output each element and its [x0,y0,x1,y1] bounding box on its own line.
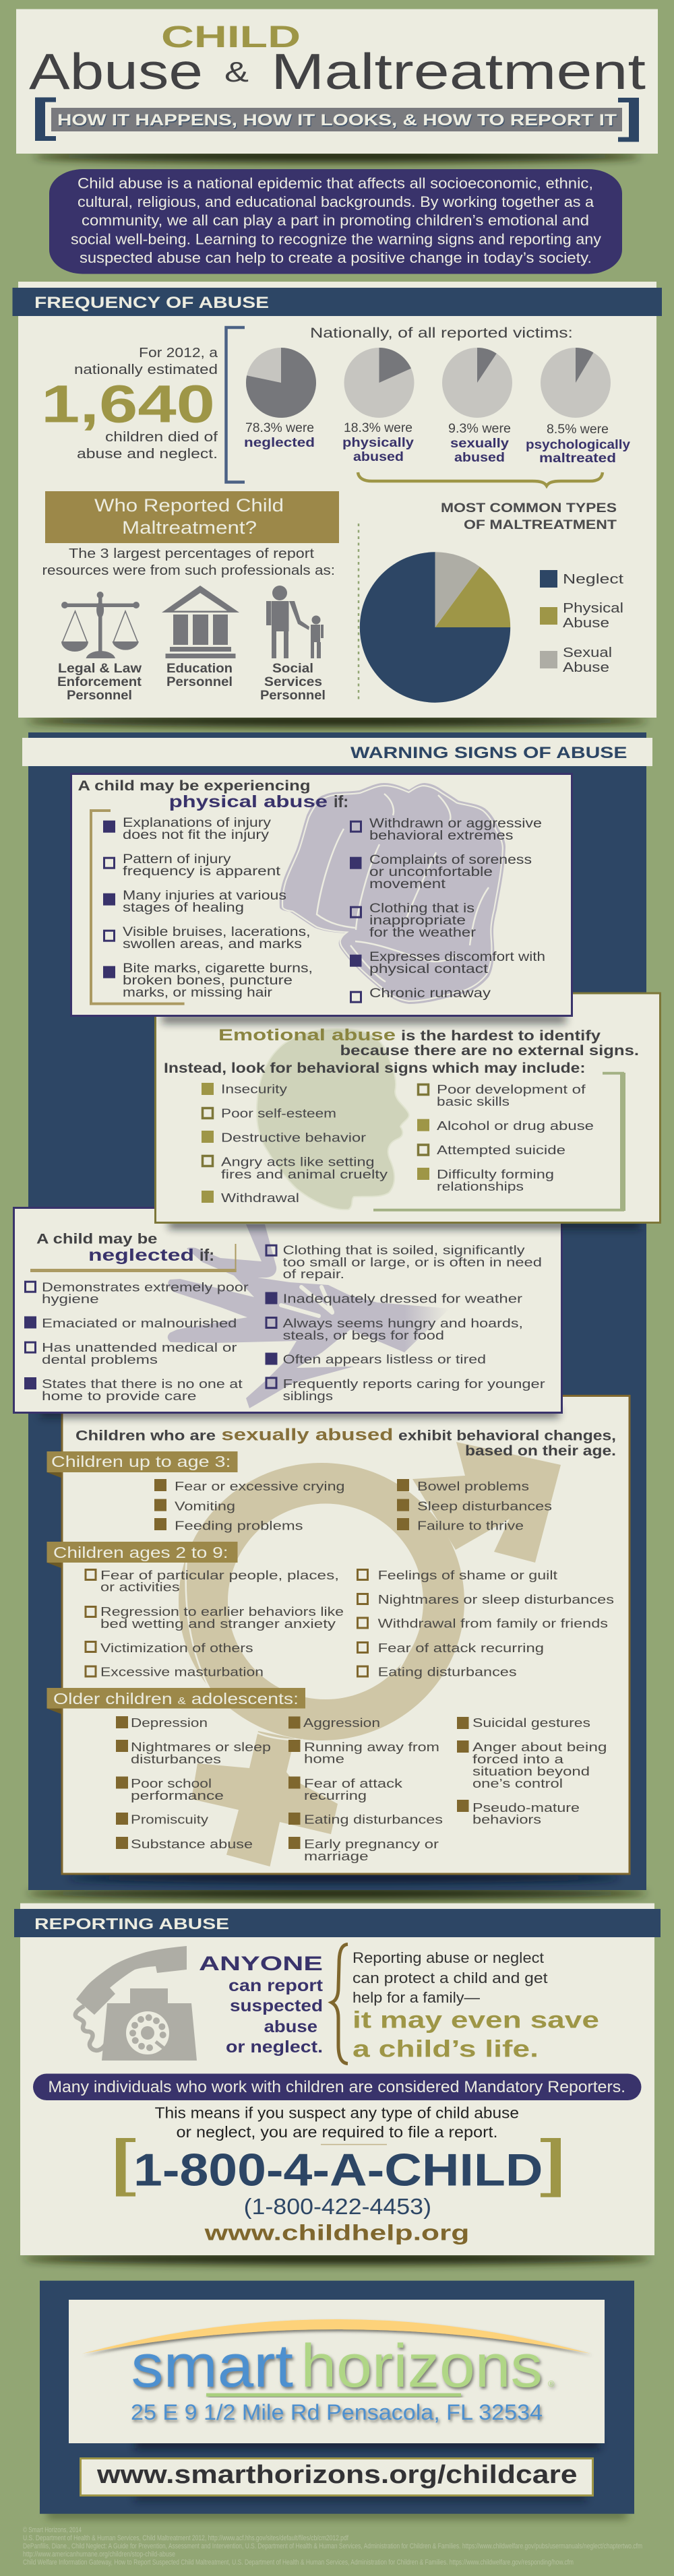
label: legal and law enforcement personnel: Personnel [67,689,132,703]
list: emotional signs left: Withdrawal [221,1191,299,1205]
panel: physical abuse [71,774,572,1024]
list: up to age 3: Feeding problems [175,1519,303,1532]
list: older children: Fear of attack [304,1777,403,1790]
list: older children: Poor school [131,1777,212,1790]
list: physical signs left: stages of healing [123,901,244,915]
title: abuse and maltreatment: Abuse [29,43,203,100]
list: older children [116,1716,607,1863]
list: older children: marriage [304,1850,369,1863]
list: ages 2 to 9: Fear of particular people, places, [100,1569,339,1582]
logo arc [82,2319,591,2354]
list: neglect signs left: home to provide care [42,1389,197,1403]
logo wordmark: smart [131,2333,293,2400]
text: anyone can report: ANYONE [199,1953,323,1975]
list: physical signs right: Chronic runaway [369,986,491,1001]
icon: adult and child [266,586,324,658]
label: education personnel: Personnel [166,675,233,689]
list: neglect signs right: Clothing that is soiled, significantly [283,1244,525,1257]
list: up to age 3: Vomiting [175,1500,235,1513]
heading: physical abuse: if: [334,792,348,811]
list: emotional signs right: Attempted suicide [437,1143,565,1157]
list: ages 2 to 9: Excessive masturbation [100,1666,264,1679]
list: older children: behaviors [472,1813,541,1827]
text: reporting can protect: it may even save [353,2007,599,2034]
heading: physical abuse [78,778,348,811]
list: older children: recurring [304,1789,367,1802]
list: physical signs right: inappropriate [369,914,466,928]
pie chart: maltreatment types [360,552,510,703]
pie: psychologically maltreated 8.5% [526,348,630,466]
heading: most common types [441,501,617,532]
list: neglect signs right: steals, or begs for food [283,1329,444,1342]
text: required to file: This means if you suspect any type of child abuse [155,2104,519,2122]
panel: introduction: suspected abuse can help to create a positive change in today’s society. [80,249,592,266]
address: 25 E 9 1/2 Mile Rd Pensacola, FL 32534 [131,2400,543,2424]
list: emotional signs right: basic skills [437,1095,510,1108]
list: ages 2 to 9: Regression to earlier behaviors like [100,1605,344,1619]
section heading bar [14,1909,661,1937]
pie: psychologically maltreated 8.5%: maltreated [539,451,616,466]
text: report resources: resources were from such professionals as: [42,563,335,578]
statistic: 1,640 children: 1,640 [41,373,215,434]
heading: most common types: MOST COMMON TYPES [441,501,617,515]
list: physical signs right: movement [369,877,446,891]
icon: hands watermark [168,1224,450,1408]
curly brace [358,472,603,486]
list: up to age 3: Sleep disturbances [417,1500,552,1513]
heading bar: warning signs of abuse: WARNING SIGNS OF ABUSE [350,744,627,762]
list: physical signs right: for the weather [369,926,477,940]
subtitle bar with brackets: HOW IT HAPPENS, HOW IT LOOKS, & HOW TO REPORT IT [57,111,617,129]
list: neglect signs left: dental problems [42,1353,158,1366]
section heading bar: REPORTING ABUSE [34,1915,229,1933]
label: education personnel [166,662,233,689]
pie: sexually abused 9.3% [442,348,512,465]
heading: emotional abuse: because there are no external signs. [340,1043,639,1059]
panel: frequency of abuse [12,282,662,727]
legend: Sexual [563,645,612,660]
title: abuse and maltreatment [29,43,646,100]
list: physical signs right [350,817,545,1002]
text: reporting can protect: can protect a child and get [353,1970,548,1986]
list: physical signs left [103,816,313,1000]
list: neglect signs right: Frequently reports caring for younger [283,1377,545,1391]
website box [81,2458,593,2496]
panel: sexual abuse [47,1396,630,1874]
pie: neglected 78.3%: 78.3% were [245,421,314,435]
list: emotional signs left: Destructive behavior [221,1131,366,1144]
statistic: 1,640 children: children died of [105,430,218,445]
list: physical signs left: does not fit the injury [123,828,270,842]
list: neglect signs left: Has unattended medical or [42,1341,237,1354]
ribbon: children ages 2 to 9: Children ages 2 to 9: [53,1544,228,1561]
title: abuse and maltreatment: Maltreatment [271,43,646,100]
heading: sexually abused [75,1425,616,1459]
legend: Abuse [563,615,609,631]
panel: smart horizons footer [40,2281,634,2519]
list: physical signs left: frequency is apparent [123,865,281,879]
ribbon: older children and adolescents [47,1688,305,1714]
legend: Abuse [563,660,609,675]
footnotes: © Smart Horizons, 2014 [23,2526,82,2534]
list: up to age 3 [154,1479,552,1532]
panel: reporting abuse [14,1904,661,2265]
list: older children: Substance abuse [131,1837,253,1851]
text: anyone can report: or neglect. [226,2038,323,2056]
list: older children: Running away from [304,1740,439,1754]
heading: emotional abuse: Emotional abuse [218,1026,396,1044]
list: neglect signs right [266,1244,545,1403]
brace [332,1945,348,2063]
heading box: who reported: Who Reported Child [94,495,284,515]
list: neglect signs right: of repair. [283,1267,344,1281]
list: physical signs left: broken bones, puncture [123,974,293,988]
list: neglect signs left: Demonstrates extremely poor [42,1280,249,1294]
text: required to file [155,2104,519,2141]
label: legal and law enforcement personnel: Legal & Law [58,662,142,676]
pie: physically abused 18.3%: abused [353,450,404,464]
list: physical signs left: Explanations of injury [123,816,272,830]
heading box: who reported: Maltreatment? [122,517,257,538]
footnotes: U.S. Department of Health & Human Services, Child Maltreatment 2012, http://www.acf.hhs.gov/sites/default/files/cb/cm2012.pdf [23,2534,349,2542]
logo wordmark: ® [548,2379,555,2389]
list: physical signs right: behavioral extremes [369,829,514,843]
list: neglect signs right: siblings [283,1389,333,1403]
footnotes: http://www.americanhumane.org/children/stop-child-abuse [23,2550,175,2558]
title: child: CHILD [161,20,301,54]
list: neglect signs left: Emaciated or malnourished [42,1317,237,1330]
list: up to age 3: Fear or excessive crying [175,1480,345,1493]
pie: physically abused 18.3%: physically [342,436,414,450]
list: physical signs left: marks, or missing hair [123,986,273,1000]
heading: physical abuse: physical abuse [169,792,328,811]
panel: emotional abuse [155,993,661,1229]
pill: mandatory reporters: Many individuals who work with children are considered Mandatory Reporters. [48,2078,625,2096]
hotline with brackets: 1-800-4-A-CHILD [133,2145,543,2196]
logo card [69,2300,605,2443]
legend: Neglect [563,571,623,587]
icon: head silhouette watermark [257,1029,409,1210]
heading: emotional abuse: Instead, look for behavioral signs which may include: [164,1061,586,1076]
statistic: 1,640 children: For 2012, a [139,346,218,360]
ribbon: children up to age 3 [47,1451,237,1478]
list: physical signs right: physical contact [369,962,489,976]
text: report resources [42,546,335,578]
pie: sexually abused 9.3%: abused [454,451,505,465]
heading box: who reported [45,491,339,543]
list: older children: Anger about being [472,1740,607,1754]
list: older children: one’s control [472,1777,563,1790]
heading: emotional abuse [164,1026,639,1076]
list: neglect signs right: too small or large, or is often in need [283,1256,542,1269]
heading: sexually abused: based on their age. [465,1443,616,1459]
ribbon: children up to age 3: Children up to age 3: [51,1453,231,1470]
panel: header [16,9,658,162]
heading bar: warning signs of abuse [22,738,652,766]
list: ages 2 to 9: Victimization of others [100,1641,253,1655]
phone number: (1-800-422-4453) [244,2194,431,2219]
list: physical signs right: Complaints of soreness [369,853,532,867]
list: physical signs right: or uncomfortable [369,865,493,879]
list: older children: home [304,1752,344,1765]
list: older children: forced into a [472,1753,564,1766]
pie: psychologically maltreated 8.5%: 8.5% were [547,422,609,437]
label: education personnel: Education [166,662,233,676]
icon: fist watermark [280,783,506,1004]
list: neglect signs right: Always seems hungry and hoards, [283,1317,523,1330]
text: anyone can report: suspected [230,1997,323,2015]
list: emotional signs left [202,1082,388,1205]
list: ages 2 to 9: Withdrawal from family or friends [378,1617,608,1631]
text: anyone can report: can report [228,1976,324,1995]
pie: physically abused 18.3%: 18.3% were [344,421,412,435]
text: anyone can report: abuse [264,2017,317,2036]
label: legal and law enforcement personnel: Enforcement [57,675,142,689]
website box: www.smarthorizons.org/childcare [96,2461,578,2489]
text: required to file: or neglect, you are required to file a report. [177,2123,497,2141]
legend: Physical [563,600,623,616]
list: physical signs left: Many injuries at various [123,889,286,903]
heading: most common types: OF MALTREATMENT [464,518,617,532]
list: emotional signs right: Difficulty forming [437,1168,554,1181]
text: reporting can protect [353,1949,599,2062]
list: neglect signs right: Inadequately dressed for weather [283,1292,522,1306]
heading: sexually abused: exhibit behavioral changes, [398,1428,616,1443]
logo wordmark [131,2333,555,2400]
list: emotional signs left: fires and animal cruelty [221,1168,388,1181]
label: legal and law enforcement personnel [57,662,142,703]
list: physical signs left: Visible bruises, lacerations, [123,925,310,939]
list: older children: Promiscuity [131,1813,208,1827]
pie: physically abused 18.3% [342,348,414,464]
list: ages 2 to 9: bed wetting and stranger anxiety [100,1617,336,1631]
list: older children: Nightmares or sleep [131,1740,271,1754]
section heading bar: FREQUENCY OF ABUSE [34,294,269,312]
statistic: 1,640 children: abuse and neglect. [77,447,218,462]
list: ages 2 to 9: or activities [100,1581,180,1594]
list: older children: situation beyond [472,1765,590,1778]
list: physical signs left: Pattern of injury [123,852,231,867]
list: physical signs left: Bite marks, cigarette burns, [123,962,313,976]
icon: school building [162,586,239,658]
list: older children: Depression [131,1716,208,1730]
list: emotional signs left: Insecurity [221,1082,287,1096]
panel: introduction: social well-being. Learning to recognize the warning signs and reporting any [71,230,602,247]
list: ages 2 to 9: Feelings of shame or guilt [378,1569,557,1582]
statistic: 1,640 children [41,346,218,462]
list: emotional signs left: Angry acts like setting [221,1155,375,1168]
list: ages 2 to 9: Fear of attack recurring [378,1641,544,1655]
footnotes [23,2526,642,2567]
pill: mandatory reporters [33,2074,642,2100]
list: emotional signs left: Poor self-esteem [221,1106,336,1120]
pie: psychologically maltreated 8.5%: psychologically [526,438,630,452]
panel: introduction: Child abuse is a national epidemic that affects all socioeconomic, ethnic, [78,175,593,192]
list: emotional signs right [417,1083,594,1193]
text: report resources: The 3 largest percentages of report [69,546,314,561]
list: older children: Aggression [303,1716,380,1730]
pie: neglected 78.3%: neglected [244,436,315,450]
heading: neglected [36,1232,214,1265]
list: ages 2 to 9: Eating disturbances [378,1666,517,1679]
icon: scales of justice [61,592,140,658]
panel: introduction: cultural, religious, and educational backgrounds. By working together as a [78,193,594,210]
list: physical signs right: Clothing that is [369,902,474,916]
list: emotional signs right: Poor development of [437,1083,586,1096]
panel: introduction: community, we all can play a part in promoting children’s emotional and [82,212,589,229]
legend [540,570,623,675]
heading: neglected: neglected [88,1246,194,1265]
text: anyone can report [199,1953,324,2056]
label: social services personnel [260,662,326,703]
heading: neglected: if: [200,1246,214,1265]
list: ages 2 to 9: Nightmares or sleep disturbances [378,1593,614,1606]
list: neglect signs left [24,1280,249,1403]
text: reporting can protect: help for a family— [353,1989,481,2006]
ribbon: children ages 2 to 9 [47,1542,237,1568]
list: emotional signs right: Alcohol or drug abuse [437,1119,594,1133]
list: emotional signs right: relationships [437,1180,524,1193]
pie: sexually abused 9.3%: sexually [450,437,510,451]
logo wordmark: horizons [301,2333,543,2400]
heading: sexually abused: sexually abused [221,1425,393,1444]
label: social services personnel: Social [272,662,313,676]
icon: rotary telephone [75,1946,197,2061]
heading: emotional abuse: is the hardest to identify [401,1028,601,1044]
panel: neglect [13,1207,562,1418]
text: reporting can protect: a child’s life. [353,2036,539,2062]
list: older children: Early pregnancy or [304,1837,439,1851]
pie: sexually abused 9.3%: 9.3% were [448,422,511,436]
heading: nationally: Nationally, of all reported victims: [310,325,573,341]
label: social services personnel: Services [264,675,322,689]
list: neglect signs right: Often appears listless or tired [283,1353,486,1366]
ribbon: older children and adolescents: Older children & adolescents: [53,1690,299,1707]
list: older children: Pseudo-mature [472,1801,580,1815]
list: up to age 3: Bowel problems [417,1480,529,1493]
list: ages 2 to 9 [86,1569,614,1679]
heading: neglected: A child may be [36,1232,157,1247]
list: older children: Eating disturbances [304,1813,443,1827]
website: childhelp: www.childhelp.org [204,2221,469,2245]
list: physical signs right: Expresses discomfort with [369,950,545,964]
panel: warning signs of abuse [13,732,661,1899]
label: social services personnel: Personnel [260,689,326,703]
title: abuse and maltreatment: & [224,56,249,88]
list: neglect signs left: hygiene [42,1292,99,1306]
statistic: 1,640 children: nationally estimated [74,363,218,377]
list: older children: Suicidal gestures [472,1716,590,1730]
list: physical signs left: swollen areas, and marks [123,937,302,951]
list: physical signs right: Withdrawn or aggressive [369,817,542,831]
heading: sexually abused: Children who are [75,1428,216,1443]
list: older children: performance [131,1789,224,1802]
subtitle bar with brackets [35,97,639,142]
list: older children: disturbances [131,1753,221,1766]
list: neglect signs left: States that there is no one at [42,1377,243,1391]
heading: physical abuse: A child may be experiencing [78,778,311,794]
section heading bar [12,288,662,316]
text: reporting can protect: Reporting abuse or neglect [353,1949,545,1966]
list: up to age 3: Failure to thrive [417,1519,524,1532]
icon: gender symbol watermark [179,1442,561,1866]
pie: neglected 78.3% [244,348,316,450]
panel: introduction [49,169,622,274]
